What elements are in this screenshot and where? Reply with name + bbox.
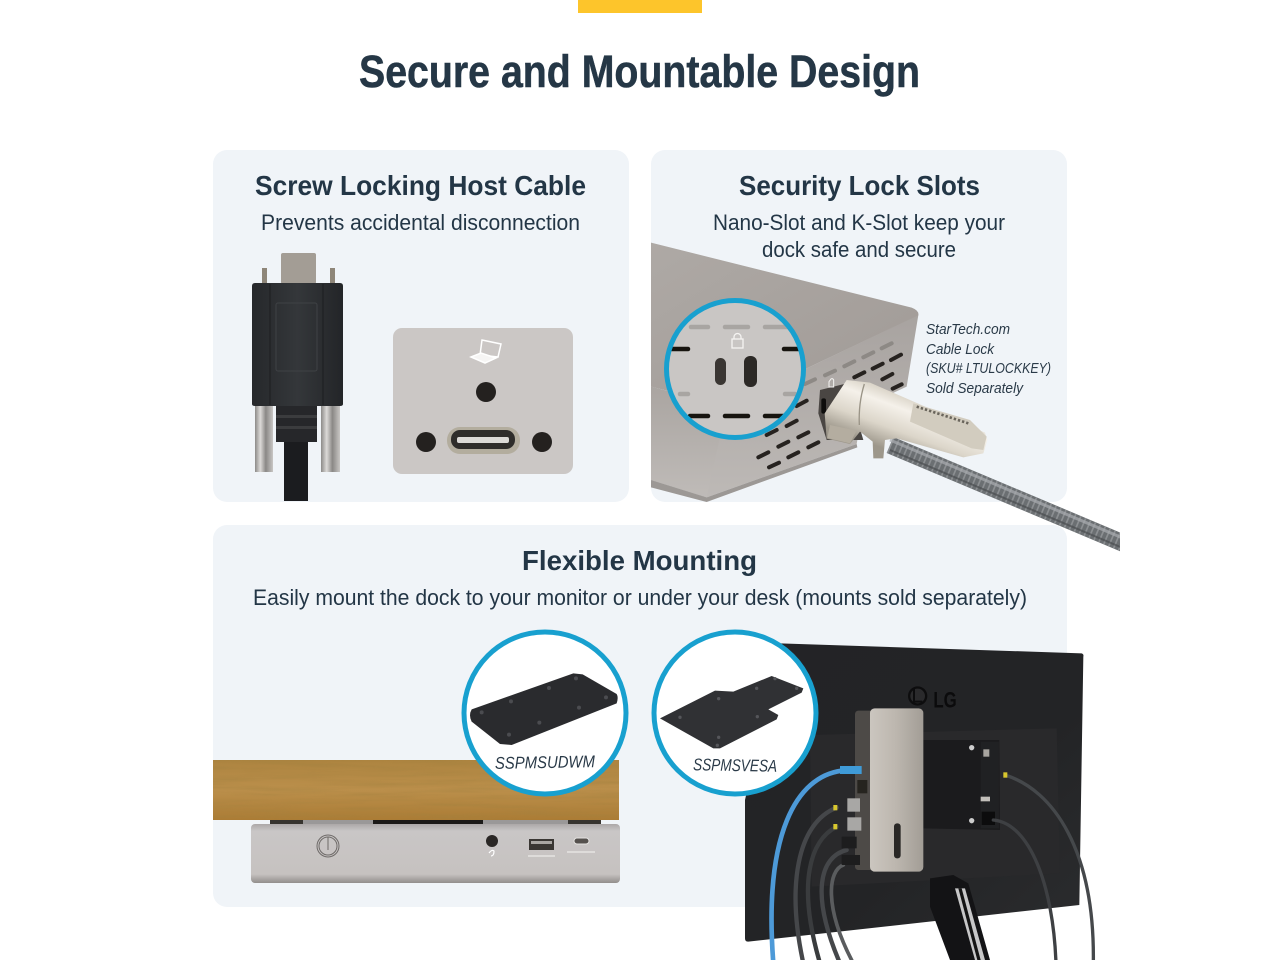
photo: wood desk top xyxy=(213,760,619,820)
heading: screw locking host cable: Screw Locking Host Cable xyxy=(255,170,586,201)
cables xyxy=(772,771,1093,960)
icon: laptop xyxy=(471,340,501,363)
callout: cable lock note: Cable Lock xyxy=(926,341,995,358)
callout: cable lock note: Sold Separately xyxy=(926,380,1024,397)
callout: cable lock note xyxy=(926,321,1051,397)
panel: security lock slots xyxy=(651,150,1143,557)
subheading: slots description: dock safe and secure xyxy=(762,237,956,262)
callout circle: SSPMSVESA VESA mount xyxy=(654,632,816,794)
label: SSPMSUDWM: SSPMSUDWM xyxy=(495,752,596,773)
monitor xyxy=(745,643,1083,942)
callout circle: SSPMSUDWM under-desk mount xyxy=(464,632,626,794)
photo: monitor back with docked cables: LG xyxy=(933,687,957,712)
subheading: prevents disconnection: Prevents accidental disconnection xyxy=(261,210,580,235)
label: SSPMSVESA: SSPMSVESA xyxy=(693,755,777,776)
photo: dock corner with vents xyxy=(651,243,918,502)
photo: dock mounted under desk xyxy=(251,820,620,883)
title: Secure and Mountable Design xyxy=(359,46,920,97)
icon: padlock xyxy=(732,334,743,348)
docked unit xyxy=(855,711,875,870)
photo: USB-C screw locking cable xyxy=(252,253,343,501)
mounting plate: SSPMSVESA xyxy=(660,676,803,748)
subheading: mounting description: Easily mount the dock to your monitor or under your desk (mounts sold separately) xyxy=(253,585,1027,610)
panel: screw locking host cable xyxy=(213,150,629,502)
photo: monitor back with docked cables xyxy=(745,643,1093,960)
photo: USB-C port plate with screw holes xyxy=(393,328,573,474)
photo: cable lock and steel cable xyxy=(825,380,1143,557)
heading: flexible mounting: Flexible Mounting xyxy=(522,545,757,576)
callout: cable lock note: (SKU# LTULOCKKEY) xyxy=(926,360,1051,377)
heading: security lock slots: Security Lock Slots xyxy=(739,170,980,201)
callout circle: lock slot close-up xyxy=(666,300,804,438)
mounting plate: SSPMSUDWM xyxy=(470,673,618,745)
subheading: slots description: Nano-Slot and K-Slot keep your xyxy=(713,210,1005,235)
yellow accent bar xyxy=(578,0,702,13)
panel: flexible mounting xyxy=(213,525,1093,960)
callout: cable lock note: StarTech.com xyxy=(926,321,1010,338)
subheading: slots description xyxy=(713,210,1005,262)
